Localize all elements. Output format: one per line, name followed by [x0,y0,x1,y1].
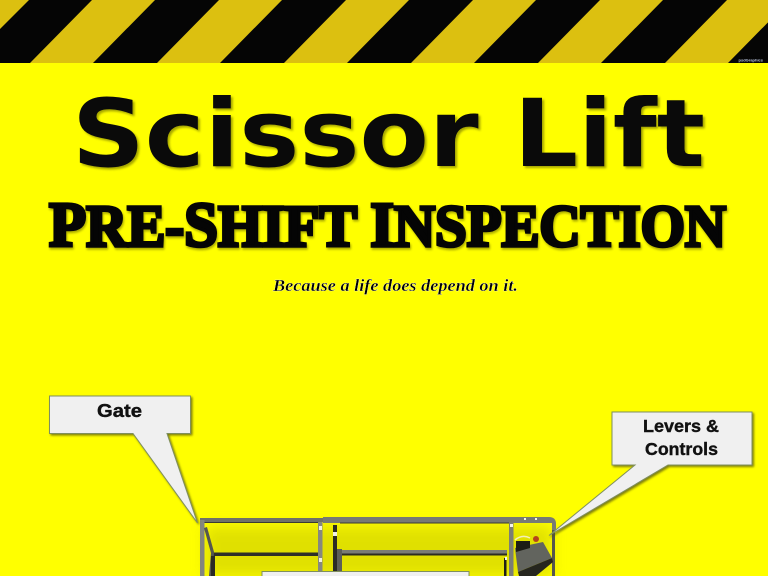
control box [515,542,552,572]
callout: levers and controls [549,412,752,536]
mid guardrail [213,552,320,556]
tagline: Because a life does depend on it. [272,276,518,295]
title: Scissor Lift [72,80,705,189]
cropped callout box at bottom edge [262,572,469,576]
hazard stripe banner [0,0,768,63]
top guardrail [200,518,323,522]
subtitle: PRE-SHIFT INSPECTION [49,190,726,260]
hazard stripe banner: psdGraphics [739,58,764,62]
subtitle: PRE-SHIFT INSPECTION [50,192,727,262]
callout: gate: Gate [97,401,142,421]
centre posts [318,522,322,576]
callout: gate [50,396,198,523]
shadow glow behind guardrails [205,526,552,576]
callout: levers and controls: Levers & [643,416,719,436]
scissor lift illustration [200,517,556,576]
left gate post [200,520,204,576]
title: Scissor Lift [74,82,707,191]
callout: levers and controls: Controls [645,439,718,459]
right posts [509,522,514,576]
